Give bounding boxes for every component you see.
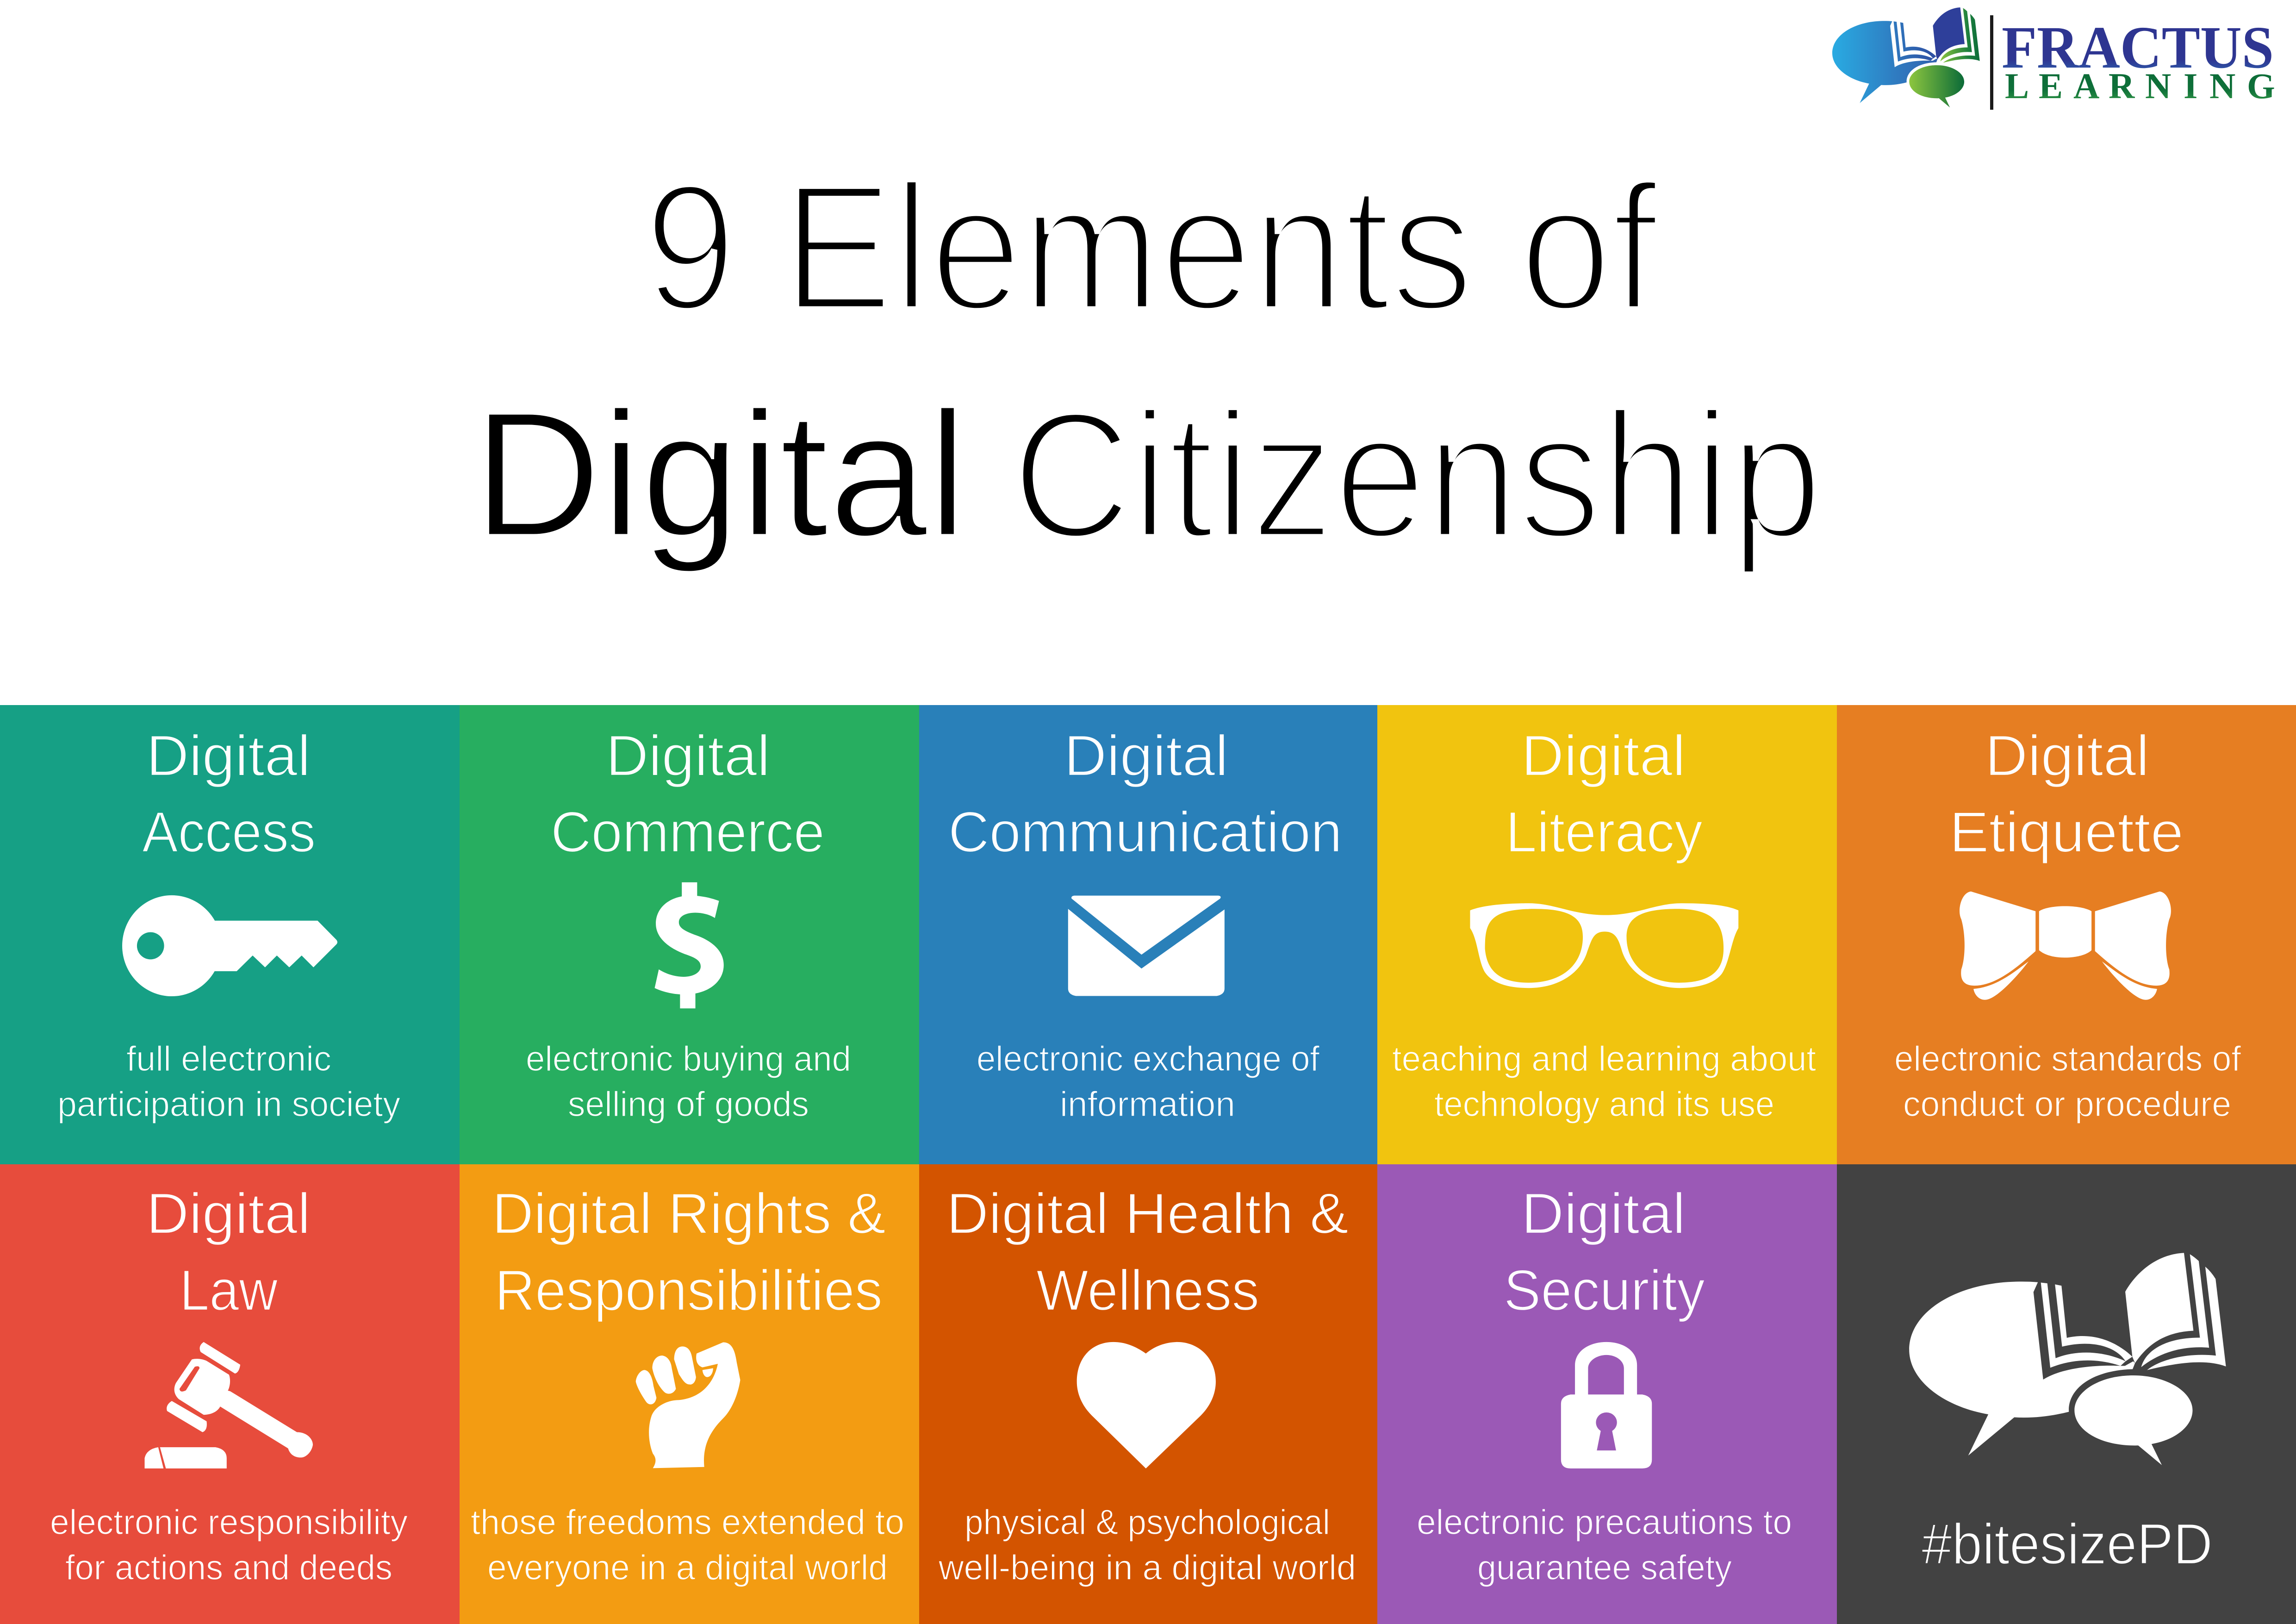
description: electronic responsibility [50, 1503, 408, 1542]
logo divider [1990, 15, 1993, 110]
description [57, 1039, 400, 1124]
title line 1: 9 Elements of [644, 146, 1658, 348]
panel: bitesizePD logo tile [1837, 1164, 2296, 1624]
heading: Commerce [551, 800, 825, 864]
icon: key [122, 895, 337, 996]
heading: Etiquette [1949, 800, 2184, 864]
heading: Communication [948, 800, 1342, 864]
panel: Digital Communication [919, 705, 1378, 1164]
panel background [1837, 1164, 2296, 1624]
heading: Security [1504, 1259, 1705, 1323]
description: physical & psychological [964, 1503, 1330, 1542]
description: information [1060, 1085, 1235, 1124]
heading [1504, 1182, 1705, 1323]
description [938, 1503, 1356, 1587]
panel background [919, 705, 1378, 1164]
description [1894, 1039, 2241, 1124]
panel background [0, 705, 460, 1164]
heading [946, 1182, 1349, 1323]
description [1417, 1503, 1792, 1587]
heading [492, 1182, 886, 1323]
description: full electronic [126, 1039, 331, 1079]
icon: heart [1077, 1342, 1216, 1468]
heading: Digital [1521, 724, 1686, 788]
title line 2: Digital (regular weight): Digital [473, 374, 967, 575]
heading: Digital [146, 724, 311, 788]
panel background [460, 1164, 920, 1624]
heading: Digital [606, 724, 770, 788]
logo: Fractus Learning [1832, 7, 2275, 110]
heading: Digital [1064, 724, 1228, 788]
panel: Digital Commerce [460, 705, 920, 1164]
panel: Digital Literacy [1377, 705, 1837, 1164]
panel: Digital Etiquette [1837, 705, 2296, 1164]
panel background [1377, 1164, 1837, 1624]
icon: padlock [1561, 1342, 1652, 1468]
heading: Digital Health & [946, 1182, 1349, 1246]
heading: Responsibilities [495, 1259, 883, 1323]
heading: Digital [1521, 1182, 1686, 1246]
icon: glasses [1470, 903, 1738, 988]
heading: Law [180, 1259, 278, 1323]
description: selling of goods [568, 1085, 809, 1124]
hashtag: #bitesizePD [1922, 1512, 2213, 1576]
description: for actions and deeds [65, 1548, 392, 1587]
heading [142, 724, 316, 864]
icon: envelope [1068, 896, 1225, 996]
heading: Digital [146, 1182, 311, 1246]
description: those freedoms extended to [471, 1503, 904, 1542]
heading [1506, 724, 1703, 864]
description: everyone in a digital world [487, 1548, 888, 1587]
panel: Digital Security [1377, 1164, 1837, 1624]
title line 2: Citizenship (thin weight): Citizenship [1012, 374, 1823, 577]
description: electronic buying and [526, 1039, 851, 1079]
panel background [1377, 705, 1837, 1164]
logo mark: speech bubbles and book [1832, 7, 1980, 107]
heading: Access [142, 800, 316, 864]
description [1392, 1039, 1816, 1124]
heading [551, 724, 825, 864]
panel background [1837, 705, 2296, 1164]
logo wordmark: LEARNING: LEARNING [2005, 66, 2275, 106]
panel: Digital Access [0, 705, 460, 1164]
panel background [460, 705, 920, 1164]
title [473, 146, 1823, 577]
description: conduct or procedure [1903, 1085, 2231, 1124]
heading [1949, 724, 2184, 864]
panel: Digital Rights and Responsibilities [460, 1164, 920, 1624]
description: electronic standards of [1894, 1039, 2241, 1079]
heading: Wellness [1036, 1259, 1259, 1323]
panel background [0, 1164, 460, 1624]
description: well-being in a digital world [938, 1548, 1356, 1587]
heading [146, 1182, 311, 1323]
description: electronic precautions to [1417, 1503, 1792, 1542]
description [977, 1039, 1320, 1124]
description: electronic exchange of [977, 1039, 1320, 1079]
icon: bow tie [1960, 892, 2171, 1000]
panel: Digital Health and Wellness [919, 1164, 1378, 1624]
panel background [919, 1164, 1378, 1624]
logo wordmark: FRACTUS: FRACTUS [2002, 14, 2274, 81]
description [471, 1503, 904, 1587]
icon: gavel [144, 1342, 313, 1468]
description: guarantee safety [1477, 1548, 1732, 1587]
description [50, 1503, 408, 1587]
description: participation in society [57, 1085, 400, 1124]
heading: Literacy [1506, 800, 1703, 864]
icon: dollar sign [655, 882, 724, 1008]
description: technology and its use [1434, 1085, 1774, 1124]
heading: Digital Rights & [492, 1182, 886, 1246]
description [526, 1039, 851, 1124]
icon: raised fist [636, 1343, 740, 1468]
panel: Digital Law [0, 1164, 460, 1624]
heading: Digital [1985, 724, 2149, 788]
description: teaching and learning about [1392, 1039, 1816, 1079]
icon: speech bubbles and open book [1909, 1253, 2226, 1465]
heading [948, 724, 1342, 864]
